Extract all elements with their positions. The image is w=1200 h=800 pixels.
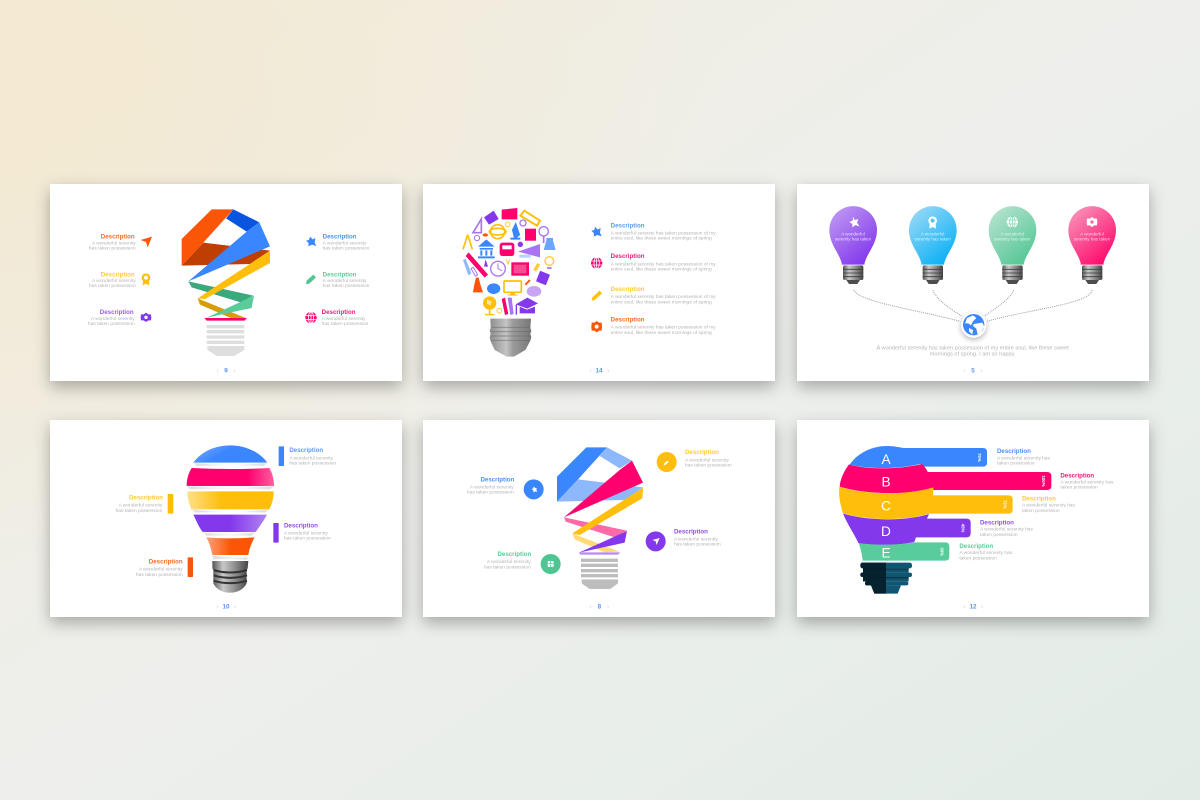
segment letters: A xyxy=(881,452,891,467)
left descriptions: A wonderful serenity xyxy=(92,278,136,284)
descriptions: Description xyxy=(149,558,183,565)
ribbon bulb xyxy=(557,447,643,589)
description list: A wonderful serenity has taken possession of my xyxy=(611,261,716,267)
left descriptions: has taken possession xyxy=(89,246,136,252)
right descriptions: A wonderful serenity xyxy=(323,278,367,284)
caption: mornings of spring. I am so happy. xyxy=(930,352,1016,358)
icon cluster bulb xyxy=(463,208,556,315)
left descriptions: has taken possession xyxy=(89,283,136,289)
right icons xyxy=(305,237,317,323)
percent labels: 75% xyxy=(977,453,982,462)
dotted connectors xyxy=(854,290,1092,321)
bulb: green: A wonderful xyxy=(1001,231,1024,236)
page number: ‹ xyxy=(964,604,966,610)
left descriptions: has taken possession xyxy=(88,321,135,327)
page number: ‹ xyxy=(217,369,219,375)
descriptions xyxy=(959,448,1114,561)
description list xyxy=(611,222,716,336)
description list: Description xyxy=(611,222,645,229)
page number: › xyxy=(980,369,982,375)
descriptions: Description xyxy=(980,520,1014,527)
descriptions: Description xyxy=(289,447,323,454)
marker bars xyxy=(168,446,284,577)
description list: entire soul, like these sweet mornings of spring xyxy=(611,267,712,273)
description list: Description xyxy=(611,253,645,260)
page number: 5 xyxy=(971,368,975,375)
descriptions: Description xyxy=(1022,496,1056,503)
dark bulb base xyxy=(860,563,912,594)
description list: entire soul, like these sweet mornings of spring xyxy=(611,236,712,242)
left descriptions: A wonderful serenity xyxy=(92,240,136,246)
panel: ribbon bulb slide 8 xyxy=(423,420,775,623)
descriptions: has taken possession xyxy=(289,461,336,467)
segment letters: E xyxy=(881,546,891,561)
right descriptions: has taken possession xyxy=(322,321,369,327)
right descriptions: Description xyxy=(322,309,356,316)
percent labels: 45% xyxy=(960,524,965,532)
descriptions: A wonderful serenity xyxy=(284,530,328,536)
page number xyxy=(590,368,609,375)
left icons xyxy=(141,237,152,322)
page number: 10 xyxy=(222,604,230,611)
right descriptions: A wonderful serenity xyxy=(323,240,367,246)
left descriptions: Description xyxy=(101,233,135,240)
right descriptions: A wonderful serenity xyxy=(322,316,366,322)
descriptions: Description xyxy=(685,449,719,456)
bulb: purple xyxy=(829,206,877,284)
descriptions: A wonderful serenity has xyxy=(1060,479,1114,485)
page number: › xyxy=(607,604,609,610)
left descriptions: Description xyxy=(101,271,135,278)
page number: › xyxy=(234,605,236,611)
descriptions: taken possession xyxy=(1060,485,1098,491)
page number: 8 xyxy=(598,603,602,610)
page number: ‹ xyxy=(217,605,219,611)
segment letters: D xyxy=(881,524,891,539)
page number: › xyxy=(607,369,609,375)
descriptions: taken possession xyxy=(959,555,997,561)
descriptions: A wonderful serenity has xyxy=(980,527,1034,533)
descriptions: taken possession xyxy=(997,461,1035,467)
description list: Description xyxy=(611,286,645,293)
list icons xyxy=(591,227,602,332)
panel: sliced bulb slide 10 xyxy=(50,420,402,623)
descriptions: A wonderful serenity xyxy=(119,503,163,509)
bulb: pink: A wonderful xyxy=(1080,231,1104,236)
bulb: purple: serenity has taken xyxy=(835,237,872,242)
percent labels: 72% xyxy=(1002,500,1007,509)
segment letters: C xyxy=(881,498,891,513)
caption xyxy=(877,346,1069,358)
bulb: blue: A wonderful xyxy=(921,231,944,236)
bulb: blue xyxy=(909,206,957,284)
bulb: pink xyxy=(1068,206,1116,284)
descriptions: A wonderful serenity xyxy=(289,455,334,461)
panel: ribbon bulb slide 9 xyxy=(50,184,402,387)
description list: A wonderful serenity has taken possession of my xyxy=(611,230,716,236)
bulb: pink: serenity has taken xyxy=(1074,237,1111,242)
page number: ‹ xyxy=(964,369,966,375)
descriptions: has taken possession xyxy=(674,542,721,548)
description list: entire soul, like these sweet mornings of spring xyxy=(611,330,712,336)
descriptions: Description xyxy=(480,476,515,483)
page number: 12 xyxy=(969,603,977,610)
page number: 9 xyxy=(224,368,228,375)
right descriptions xyxy=(322,233,370,327)
panel: A-E bar bulb slide 12 xyxy=(797,420,1149,623)
right descriptions: has taken possession xyxy=(323,283,370,289)
descriptions: has taken possession xyxy=(136,572,183,578)
page number xyxy=(964,368,982,375)
descriptions: A wonderful serenity xyxy=(487,559,531,565)
panel: education icons bulb slide 14 xyxy=(423,184,775,387)
descriptions: Description xyxy=(959,543,993,550)
descriptions: Description xyxy=(284,522,318,529)
panel: four bulbs slide 5 xyxy=(797,184,1149,387)
description list: Description xyxy=(611,317,645,324)
descriptions: Description xyxy=(129,495,163,502)
page number: ‹ xyxy=(590,369,592,375)
metal bulb base xyxy=(490,319,531,357)
right descriptions: Description xyxy=(323,271,357,278)
page number xyxy=(590,603,609,610)
descriptions: Description xyxy=(1060,472,1094,479)
descriptions xyxy=(467,449,732,570)
descriptions: A wonderful serenity xyxy=(674,536,718,542)
percent labels xyxy=(939,453,1046,556)
left descriptions: Description xyxy=(100,309,134,316)
descriptions: A wonderful serenity has xyxy=(959,550,1013,556)
descriptions: has taken possession xyxy=(467,490,514,496)
descriptions: A wonderful serenity xyxy=(139,566,183,572)
percent labels: 30% xyxy=(939,547,944,556)
page number: ‹ xyxy=(590,604,592,610)
page number: 14 xyxy=(595,368,603,375)
descriptions: has taken possession xyxy=(484,564,531,570)
page number xyxy=(217,604,236,611)
page number: › xyxy=(233,369,235,375)
badges xyxy=(524,452,677,574)
right descriptions: has taken possession xyxy=(323,246,370,252)
descriptions: Description xyxy=(497,551,532,558)
descriptions xyxy=(116,447,336,578)
descriptions: A wonderful serenity has xyxy=(997,455,1051,461)
bulb: green xyxy=(989,206,1036,284)
description list: A wonderful serenity has taken possession of my xyxy=(611,294,716,300)
segment letters xyxy=(881,452,891,561)
descriptions: has taken possession xyxy=(685,463,732,469)
bulb: purple: A wonderful xyxy=(841,231,865,236)
ribbon bulb xyxy=(182,209,270,356)
description list: entire soul, like these sweet mornings of spring xyxy=(611,299,712,305)
descriptions: has taken possession xyxy=(116,508,163,514)
bulb: green: serenity has taken xyxy=(994,237,1031,242)
bulb: blue: serenity has taken xyxy=(914,237,951,242)
bars and bulb segments xyxy=(839,446,1051,561)
segment letters: B xyxy=(881,474,891,489)
sliced bulb xyxy=(187,445,274,593)
left descriptions xyxy=(88,233,136,327)
descriptions: A wonderful serenity has xyxy=(1022,503,1076,509)
descriptions: Description xyxy=(997,448,1031,455)
descriptions: has taken possession xyxy=(284,535,331,541)
percent labels: 100% xyxy=(1041,475,1046,487)
descriptions: A wonderful serenity xyxy=(685,457,729,463)
descriptions: A wonderful serenity xyxy=(470,484,514,490)
right descriptions: Description xyxy=(323,233,357,240)
page number xyxy=(217,368,235,375)
descriptions: taken possession xyxy=(1022,508,1060,514)
description list: A wonderful serenity has taken possession of my xyxy=(611,325,716,331)
globe badge xyxy=(961,312,986,338)
caption: A wonderful serenity has taken possession of my entire soul, like these sweet xyxy=(877,346,1069,352)
left descriptions: A wonderful serenity xyxy=(91,316,135,322)
descriptions: Description xyxy=(674,528,708,535)
page number: › xyxy=(981,604,983,610)
page number xyxy=(964,603,983,610)
descriptions: taken possession xyxy=(980,532,1018,538)
